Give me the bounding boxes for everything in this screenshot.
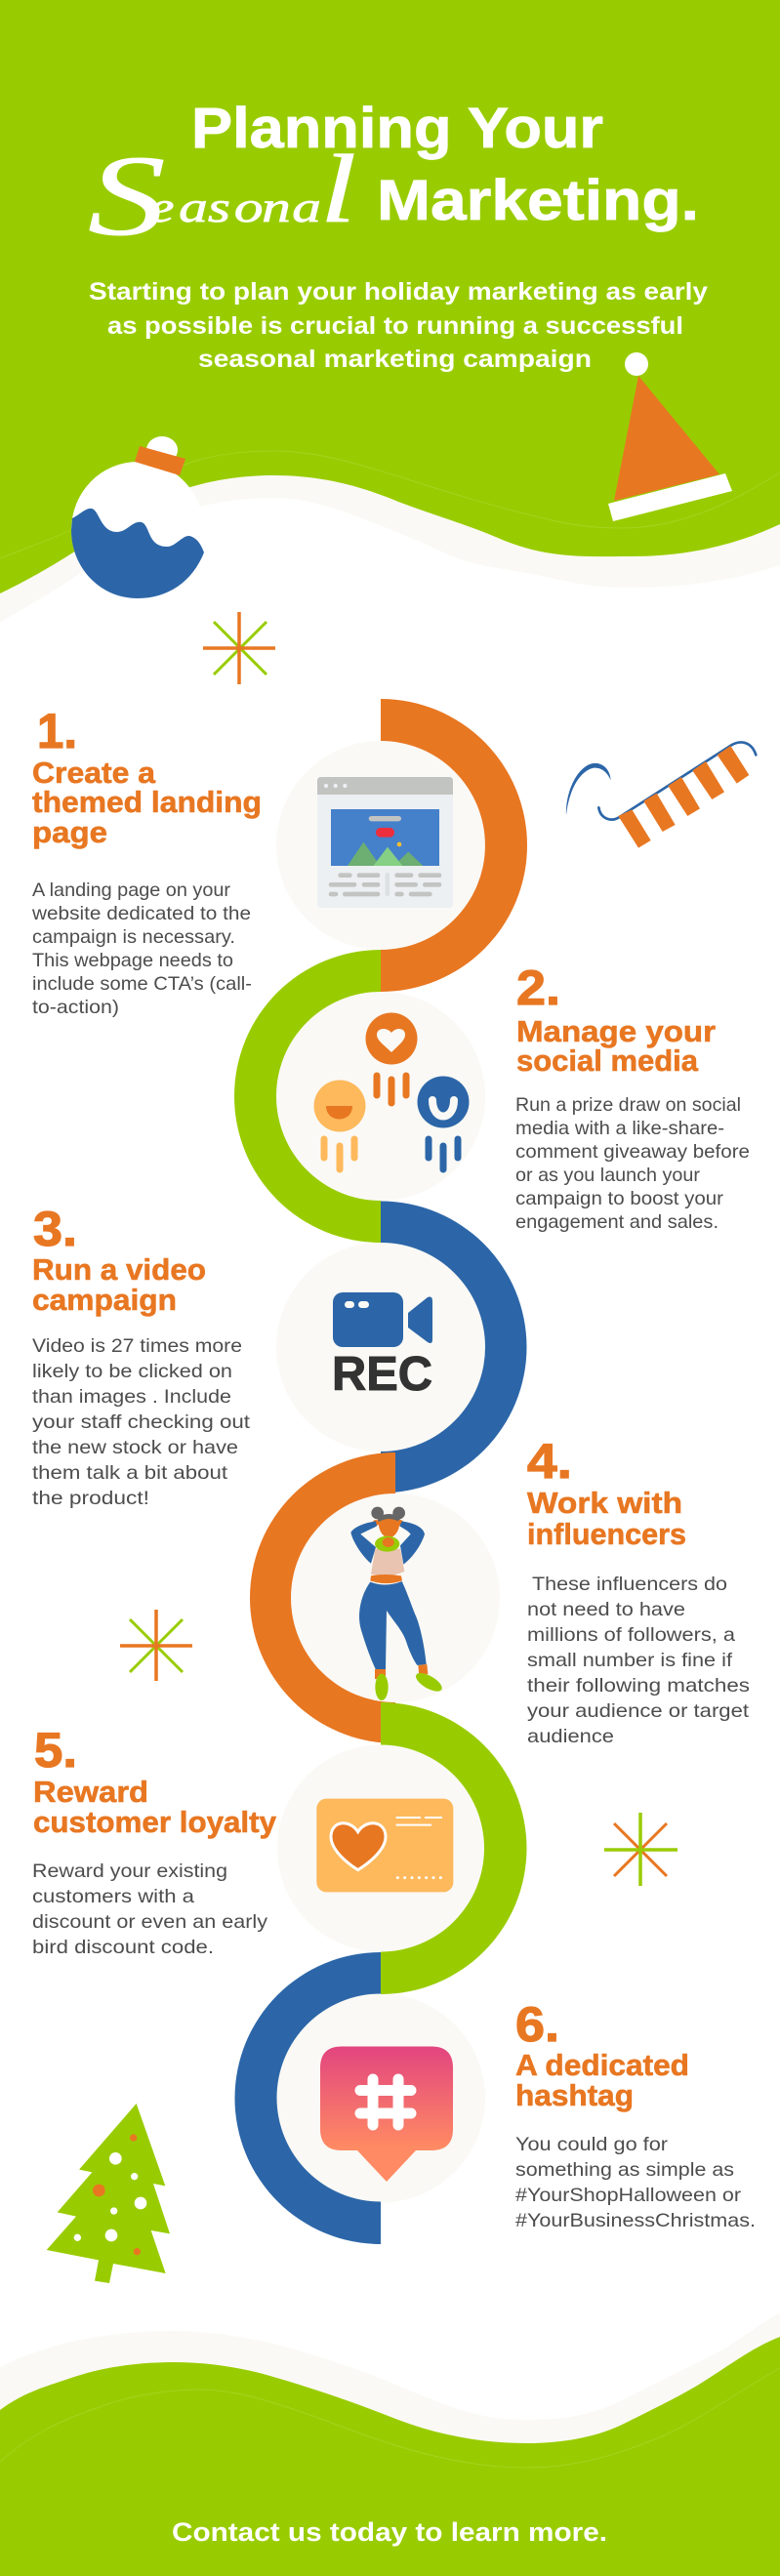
panel: step 4 text: influencers	[527, 1517, 686, 1551]
panel: step 5 text: customer loyalty	[33, 1805, 277, 1839]
panel: step 5 text	[32, 1723, 277, 1958]
icon: sparkle star right	[604, 1813, 677, 1886]
icon: landing page browser	[317, 777, 453, 908]
icon: christmas tree	[47, 2104, 170, 2283]
panel: step 4 text: not need to have	[527, 1599, 685, 1620]
panel: step 1 text: A landing page on your	[32, 879, 231, 901]
panel: step 2 text: Manage your	[516, 1014, 716, 1048]
panel: step 4 text: audience	[527, 1726, 614, 1747]
panel: step 6 text	[515, 1997, 756, 2231]
panel: step 2 text: engagement and sales.	[515, 1211, 718, 1233]
panel: step 4 text: 4.	[527, 1434, 572, 1489]
panel: step 4 text: your audience or target	[527, 1700, 750, 1722]
intro text: seasonal marketing campaign	[198, 346, 592, 373]
icon: video camera REC	[332, 1292, 432, 1401]
panel: step 3 text: the product!	[32, 1488, 149, 1509]
panel: step 3 text	[32, 1202, 251, 1509]
panel: step 5 text: discount or even an early	[32, 1911, 267, 1933]
panel: step 3 text: the new stock or have	[32, 1437, 238, 1458]
panel: step 4 text: Work with	[527, 1486, 682, 1520]
intro text	[89, 278, 708, 373]
title	[88, 97, 699, 260]
intro text: Starting to plan your holiday marketing as early	[89, 278, 708, 306]
icon: social media reactions	[314, 1013, 469, 1169]
panel: step 4 text: small number is fine if	[527, 1650, 733, 1671]
icon: striped ribbon	[566, 742, 756, 848]
panel: step 3 text: Run a video	[32, 1252, 206, 1287]
header wave background	[0, 0, 780, 623]
icon: loyalty card	[316, 1799, 453, 1892]
panel: step 1 text	[31, 704, 262, 1018]
panel: step 6 text: 6.	[515, 1997, 559, 2052]
panel: step 1 text: website dedicated to the	[31, 903, 251, 924]
panel: step 1 text: This webpage needs to	[32, 950, 233, 971]
panel: step 5 text: customers with a	[32, 1886, 194, 1907]
title: l	[320, 135, 356, 243]
panel: step 3 text: your staff checking out	[32, 1411, 251, 1433]
panel: step 4 text: millions of followers, a	[527, 1624, 735, 1646]
panel: step 6 text: You could go for	[515, 2134, 669, 2155]
panel: step 5 text: 5.	[34, 1723, 77, 1778]
panel: step 2 text: 2.	[516, 961, 560, 1015]
panel: step 3 text: them talk a bit about	[32, 1462, 228, 1484]
title: easona	[148, 184, 321, 231]
icon: sparkle star left	[120, 1610, 192, 1681]
panel: step 1 text: Create a	[32, 756, 156, 790]
panel: step 5 text: bird discount code.	[32, 1937, 214, 1958]
panel: step 1 text: 1.	[37, 704, 77, 758]
panel: step 2 text: or as you launch your	[515, 1165, 701, 1186]
panel: step 6 text: A dedicated	[515, 2048, 689, 2082]
icon: hashtag bubble	[320, 2046, 453, 2182]
panel: step 5 text: Reward	[33, 1775, 148, 1809]
panel: step 2 text: campaign to boost your	[515, 1188, 724, 1209]
panel: step 1 text: page	[32, 815, 107, 849]
icon: sparkle star top	[203, 612, 275, 684]
panel: step 4 text	[527, 1434, 750, 1747]
icon: santa hat	[608, 352, 732, 521]
panel: step 3 text: Video is 27 times more	[32, 1335, 242, 1357]
panel: step 3 text: than images . Include	[32, 1386, 231, 1408]
footer call to action: Contact us today to learn more.	[172, 2517, 607, 2547]
panel: step 1 text: themed landing	[32, 785, 262, 819]
panel: step 6 text: hashtag	[515, 2078, 634, 2112]
panel: step 4 text: their following matches	[527, 1675, 750, 1697]
panel: step 2 text: media with a like-share-	[515, 1118, 724, 1139]
icon: video camera REC: REC	[332, 1348, 432, 1401]
panel: step 4 text: These influencers do	[532, 1574, 727, 1595]
panel: step 1 text: to-action)	[32, 997, 119, 1018]
panel: step 1 text: include some CTA’s (call-	[32, 973, 252, 995]
intro text: as possible is crucial to running a successful	[107, 312, 683, 340]
title: Marketing.	[377, 169, 699, 232]
icon: influencer woman	[350, 1507, 444, 1700]
panel: step 1 text: campaign is necessary.	[32, 926, 235, 948]
title: Planning Your	[191, 97, 603, 160]
panel: step 6 text: something as simple as	[515, 2159, 734, 2181]
panel: step 3 text: 3.	[33, 1202, 77, 1256]
panel: step 5 text: Reward your existing	[32, 1860, 227, 1882]
icon: ornament bauble	[71, 436, 204, 598]
title: S	[88, 133, 166, 260]
panel: step 2 text: comment giveaway before	[515, 1141, 750, 1163]
panel: step 6 text: #YourBusinessChristmas.	[515, 2210, 756, 2231]
panel: step 3 text: campaign	[32, 1283, 177, 1317]
panel: step 3 text: likely to be clicked on	[32, 1361, 232, 1382]
panel: step 6 text: #YourShopHalloween or	[515, 2185, 742, 2206]
panel: step 2 text: social media	[516, 1043, 699, 1078]
panel: step 2 text	[515, 961, 750, 1233]
panel: step 2 text: Run a prize draw on social	[515, 1094, 741, 1116]
footer wave background	[0, 2312, 780, 2576]
chart: spiral path with circles	[234, 699, 527, 2244]
